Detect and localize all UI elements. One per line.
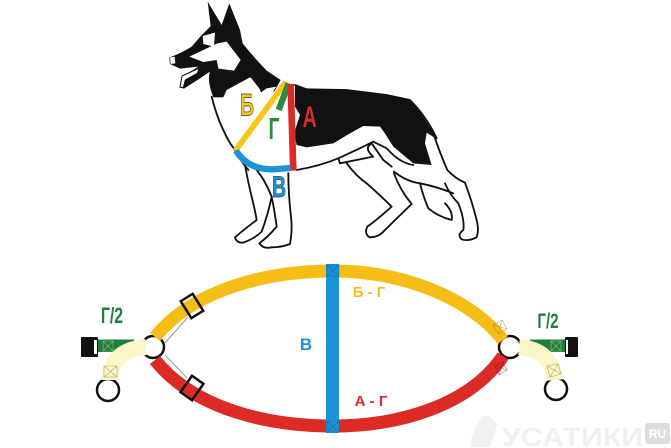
blue strap: В: [326, 264, 339, 433]
watermark badge: [645, 423, 670, 444]
dog black saddle: [294, 85, 437, 165]
measurement line: Г (green): [279, 83, 289, 110]
label: Г: Г: [268, 113, 279, 146]
left main ring: [142, 336, 164, 358]
left black buckle: [81, 337, 98, 357]
watermark dog icon: [470, 416, 497, 447]
measurement line: Б (yellow): [235, 82, 286, 151]
thin threads from rings to sliders: [165, 317, 188, 378]
dog illustration with measurement lines: [169, 2, 478, 248]
yellow strap: Б - Г: [155, 271, 503, 340]
label: Б - Г: Б - Г: [353, 284, 386, 301]
right green strap: [530, 340, 568, 352]
right black buckle: [565, 337, 578, 357]
measurement line: А (red): [291, 84, 293, 171]
watermark: [470, 416, 670, 448]
right small ring: [545, 378, 567, 400]
label: А: А: [303, 101, 317, 134]
label: В: В: [272, 171, 286, 204]
label: А - Г: А - Г: [355, 393, 388, 410]
label: Б: Б: [240, 87, 254, 123]
dog head and neck: [169, 2, 281, 97]
harness pattern: [81, 264, 578, 433]
left cream strap: [110, 347, 146, 380]
left small ring: [97, 379, 119, 401]
stitch patches: [103, 265, 561, 432]
label: left Г/2: Г/2: [101, 305, 123, 329]
measurement line: В (blue): [236, 151, 291, 169]
right main ring: [499, 336, 521, 358]
label: В: В: [300, 335, 312, 354]
red strap: А - Г: [155, 356, 503, 426]
watermark badge: RU: [649, 427, 666, 441]
left lower slider: [181, 376, 203, 400]
left green strap: [96, 340, 134, 352]
label: right Г/2: Г/2: [537, 308, 559, 333]
dog body outline: [212, 85, 478, 248]
left upper slider: [181, 294, 203, 318]
dog face white markings: [170, 33, 280, 147]
right cream strap: [519, 347, 555, 380]
